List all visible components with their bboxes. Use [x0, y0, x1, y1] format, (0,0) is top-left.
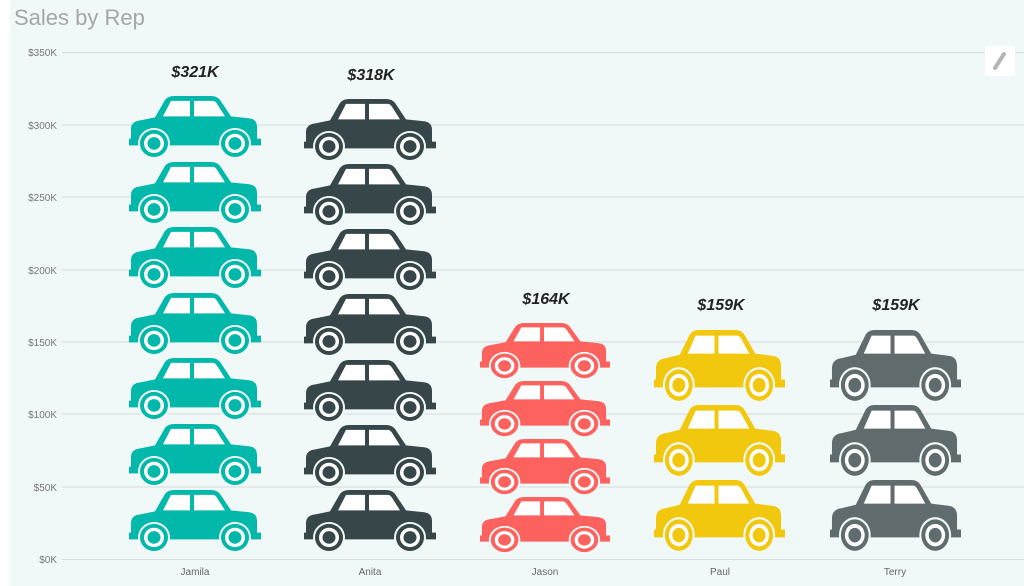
value labels [170, 64, 921, 314]
category labels: Jason [532, 567, 558, 578]
column: Jason [480, 323, 610, 554]
y axis labels: $50K [34, 483, 57, 494]
column: Terry [830, 330, 961, 553]
value labels: $159K [696, 297, 746, 314]
category labels: Paul [710, 567, 730, 578]
title: Sales by Rep [14, 5, 145, 30]
category labels [181, 567, 906, 578]
column: Anita [304, 99, 436, 553]
y axis labels: $250K [28, 193, 57, 204]
category labels: Anita [359, 567, 382, 578]
value labels: $318K [346, 67, 396, 84]
column: Jamila [129, 96, 261, 553]
value labels: $164K [521, 291, 571, 308]
value labels: $159K [871, 297, 921, 314]
y axis labels: $0K [39, 555, 57, 566]
category labels: Terry [884, 567, 906, 578]
value labels: $321K [170, 64, 220, 81]
y axis labels: $300K [28, 121, 57, 132]
y axis labels: $150K [28, 338, 57, 349]
y axis labels: $200K [28, 266, 57, 277]
column: Paul [654, 330, 785, 553]
icon: pencil [985, 46, 1015, 76]
y axis labels: $100K [28, 410, 57, 421]
y axis labels [28, 48, 57, 566]
category labels: Jamila [181, 567, 210, 578]
y axis labels: $350K [28, 48, 57, 59]
